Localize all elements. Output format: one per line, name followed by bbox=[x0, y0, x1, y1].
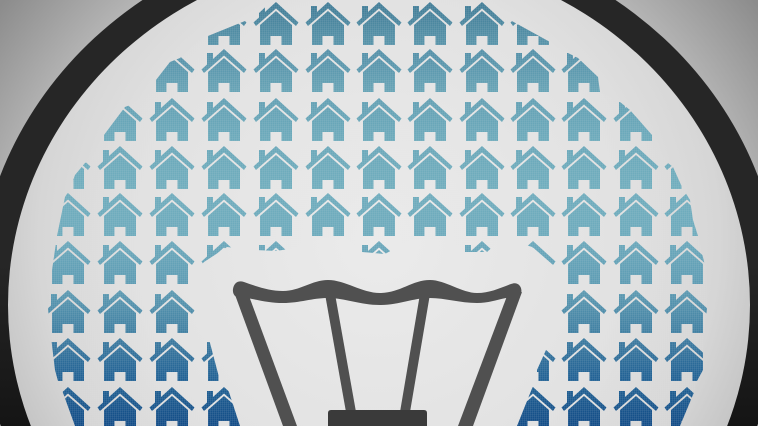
icon: light bulb filament bbox=[233, 280, 522, 426]
house row 2 bbox=[150, 49, 606, 92]
house row 6 bbox=[46, 241, 710, 284]
filament inner right bar bbox=[400, 294, 430, 412]
filament top wave bbox=[233, 280, 521, 305]
house row 3 bbox=[98, 98, 658, 141]
house row 4 bbox=[46, 146, 710, 189]
house row 5 bbox=[46, 193, 710, 236]
filament right leg bbox=[458, 292, 522, 426]
house row 9 bbox=[46, 387, 710, 426]
filament left leg bbox=[234, 292, 297, 426]
bulb base bbox=[328, 410, 427, 426]
house row 7 bbox=[46, 290, 710, 333]
filament inner left bar bbox=[325, 294, 356, 412]
house row 1 bbox=[202, 2, 556, 45]
house row 8 bbox=[46, 338, 710, 381]
